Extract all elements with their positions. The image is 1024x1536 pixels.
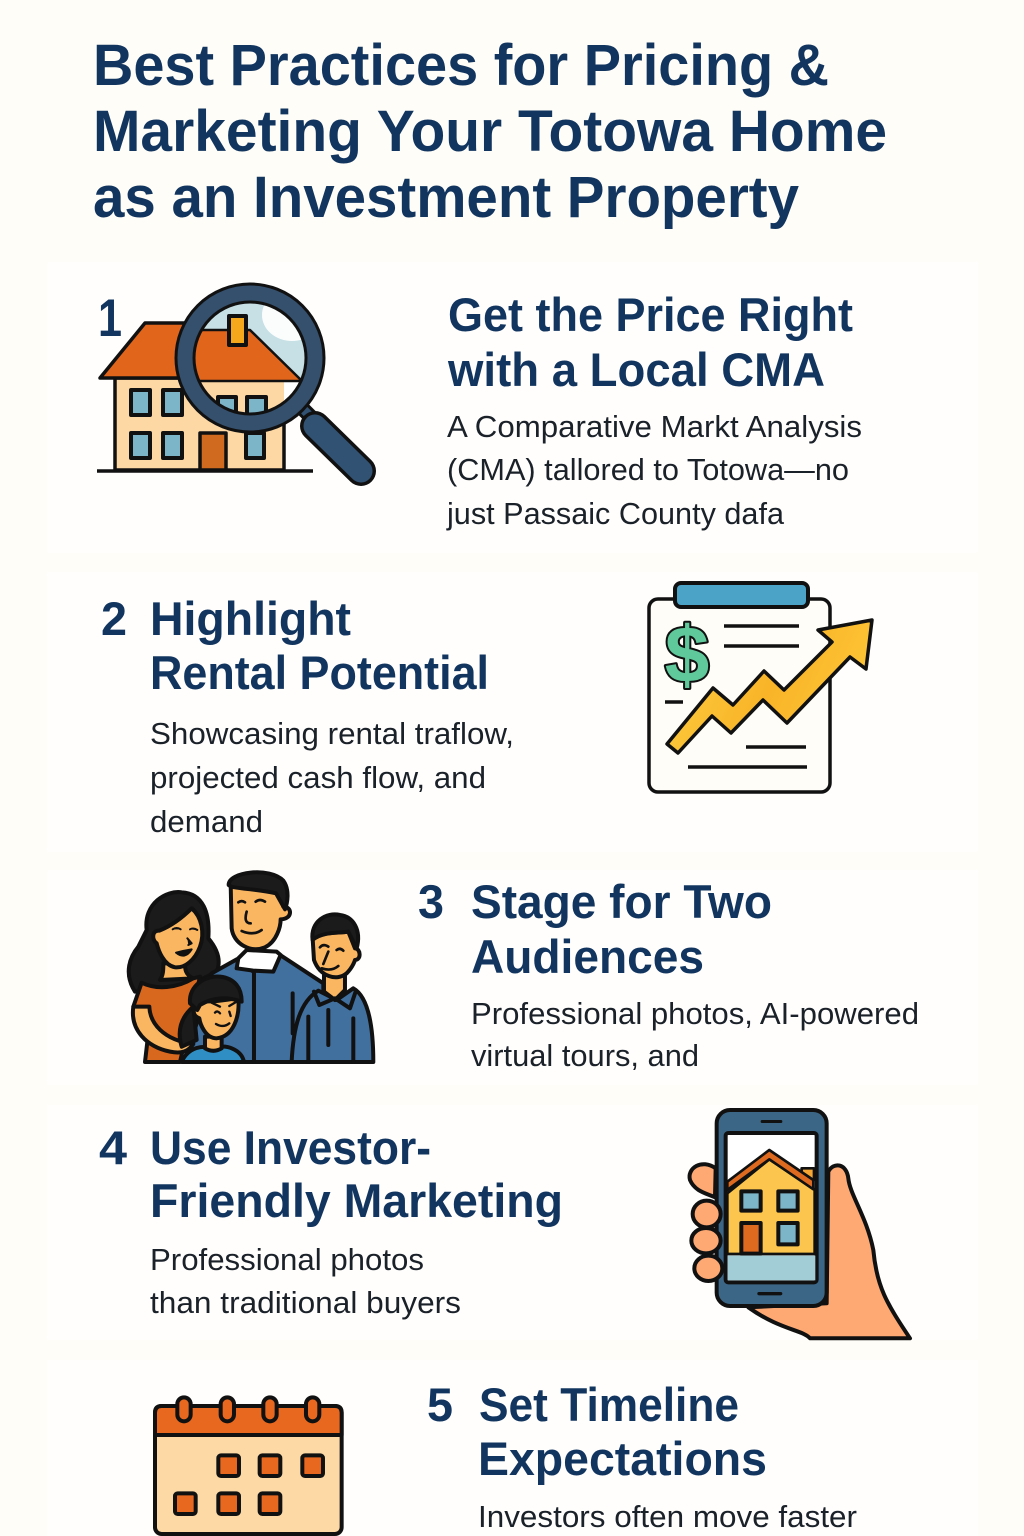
title: as an Investment Property xyxy=(93,165,799,230)
text block: Professional photos, AI-powered xyxy=(471,996,919,1031)
icon: clipboard with dollar and rising arrow: $ xyxy=(665,610,709,699)
panel: step 5 set timeline expectations xyxy=(47,1360,978,1536)
text block: Showcasing rental traflow, xyxy=(150,716,514,751)
text block xyxy=(150,716,514,839)
heading: Highlight xyxy=(150,592,351,645)
heading: with a Local CMA xyxy=(447,343,825,396)
title xyxy=(93,33,887,230)
heading xyxy=(447,288,853,396)
text block: A Comparative Markt Analysis xyxy=(447,409,862,444)
title: Best Practices for Pricing & xyxy=(93,33,829,98)
text block xyxy=(471,996,919,1073)
panel: step 1 get the price right xyxy=(97,282,861,530)
heading xyxy=(150,592,489,699)
heading xyxy=(150,1121,563,1227)
icon: house under magnifying glass xyxy=(97,289,361,471)
heading xyxy=(478,1378,767,1485)
step number 5: 5 xyxy=(427,1378,453,1431)
text block xyxy=(446,409,862,531)
text block xyxy=(150,1242,461,1320)
text block: (CMA) tallored to Totowa—no xyxy=(447,452,849,487)
step number 2: 2 xyxy=(101,592,127,645)
text block: than traditional buyers xyxy=(150,1285,461,1320)
step number 1: 1 xyxy=(98,289,122,348)
text block: Investors often move faster xyxy=(478,1499,857,1534)
heading: Expectations xyxy=(478,1432,767,1485)
text block: Professional photos xyxy=(150,1242,424,1277)
heading: Get the Price Right xyxy=(448,288,853,341)
icon: clipboard with dollar and rising arrow xyxy=(649,583,872,792)
heading xyxy=(471,875,772,983)
icon: calendar xyxy=(155,1397,342,1534)
heading: Set Timeline xyxy=(479,1378,739,1431)
heading: Stage for Two xyxy=(471,875,772,928)
title: Marketing Your Totowa Home xyxy=(93,99,887,164)
panel: step 4 use investor-friendly marketing xyxy=(47,1105,978,1340)
panel: step 2 highlight rental potential xyxy=(47,572,978,852)
icon: family of four xyxy=(129,872,373,1062)
heading: Audiences xyxy=(471,930,704,983)
text block: projected cash flow, and xyxy=(150,760,486,795)
step number 4: 4 xyxy=(99,1121,127,1174)
text block: virtual tours, and xyxy=(471,1038,699,1073)
text block: just Passaic County dafa xyxy=(446,496,785,531)
icon: hand holding phone with house xyxy=(690,1110,910,1338)
text block: demand xyxy=(150,804,263,839)
heading: Friendly Marketing xyxy=(150,1174,563,1227)
step number 3: 3 xyxy=(418,875,444,928)
heading: Rental Potential xyxy=(150,646,489,699)
heading: Use Investor- xyxy=(150,1121,431,1174)
panel: step 3 stage for two audiences xyxy=(47,870,978,1085)
